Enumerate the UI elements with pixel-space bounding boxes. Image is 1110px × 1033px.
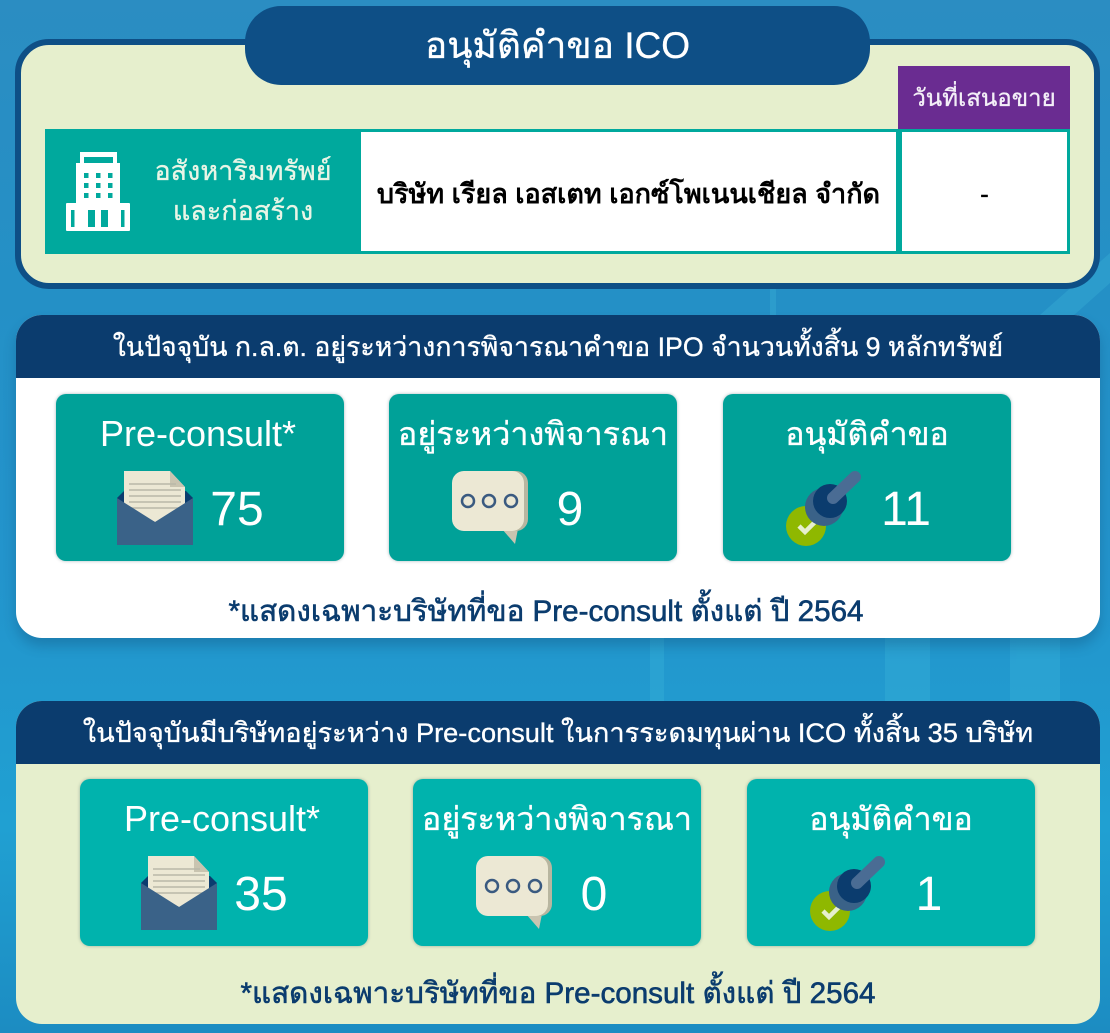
offering date value: - xyxy=(980,178,989,208)
sector name xyxy=(154,156,332,226)
value: 11 xyxy=(881,482,931,536)
offering date label xyxy=(898,66,1070,129)
card: ICO pre-consult xyxy=(80,779,368,946)
icon: envelope xyxy=(117,471,193,545)
panel: IPO status xyxy=(16,315,1100,638)
sector name: อสังหาริมทรัพย์ xyxy=(154,156,332,186)
card: ICO under review xyxy=(413,779,701,946)
company name cell: บริษัท เรียล เอสเตท เอกซ์โพเนนเชียล จำกัด xyxy=(377,178,880,208)
value: 0 xyxy=(581,868,607,920)
IPO heading xyxy=(16,315,1100,378)
ICO heading: ในปัจจุบันมีบริษัทอยู่ระหว่าง Pre-consult ในการระดมทุนผ่าน ICO ทั้งสิ้น 35 บริษัท xyxy=(83,717,1033,748)
sector cell xyxy=(45,129,361,254)
label: อยู่ระหว่างพิจารณา xyxy=(422,800,692,836)
ICO heading xyxy=(16,701,1100,764)
IPO heading: ในปัจจุบัน ก.ล.ต. อยู่ระหว่างการพิจารณาคำขอ IPO จำนวนทั้งสิ้น 9 หลักทรัพย์ xyxy=(113,332,1003,362)
icon: building xyxy=(66,152,130,231)
title: อนุมัติคำขอ ICO xyxy=(425,25,690,66)
label: อยู่ระหว่างพิจารณา xyxy=(398,416,668,452)
value: 35 xyxy=(234,868,288,920)
card: IPO under review xyxy=(389,394,677,561)
panel: ICO approval request xyxy=(15,39,1100,289)
value: 9 xyxy=(557,482,583,536)
icon: approval stamp xyxy=(810,856,885,931)
value: 75 xyxy=(210,482,264,536)
label: อนุมัติคำขอ xyxy=(809,800,973,836)
offering date label: วันที่เสนอขาย xyxy=(912,85,1056,112)
card: ICO approved xyxy=(747,779,1035,946)
footnote: *แสดงเฉพาะบริษัทที่ขอ Pre-consult ตั้งแต่ ปี 2564 xyxy=(229,594,863,628)
card: IPO pre-consult xyxy=(56,394,344,561)
icon: speech bubble xyxy=(452,471,528,544)
icon: envelope xyxy=(141,856,217,930)
company name cell xyxy=(358,129,899,254)
icon: approval stamp xyxy=(786,471,861,546)
sector name: และก่อสร้าง xyxy=(173,196,313,226)
label: Pre-consult* xyxy=(100,413,296,454)
label: Pre-consult* xyxy=(124,798,320,839)
icon: speech bubble xyxy=(476,856,552,929)
value: 1 xyxy=(916,868,942,920)
card: IPO approved xyxy=(723,394,1011,561)
footnote: *แสดงเฉพาะบริษัทที่ขอ Pre-consult ตั้งแต่ ปี 2564 xyxy=(241,976,875,1010)
label: อนุมัติคำขอ xyxy=(785,416,949,452)
offering date value xyxy=(899,129,1070,254)
panel: ICO status xyxy=(16,701,1100,1024)
title xyxy=(245,6,870,85)
